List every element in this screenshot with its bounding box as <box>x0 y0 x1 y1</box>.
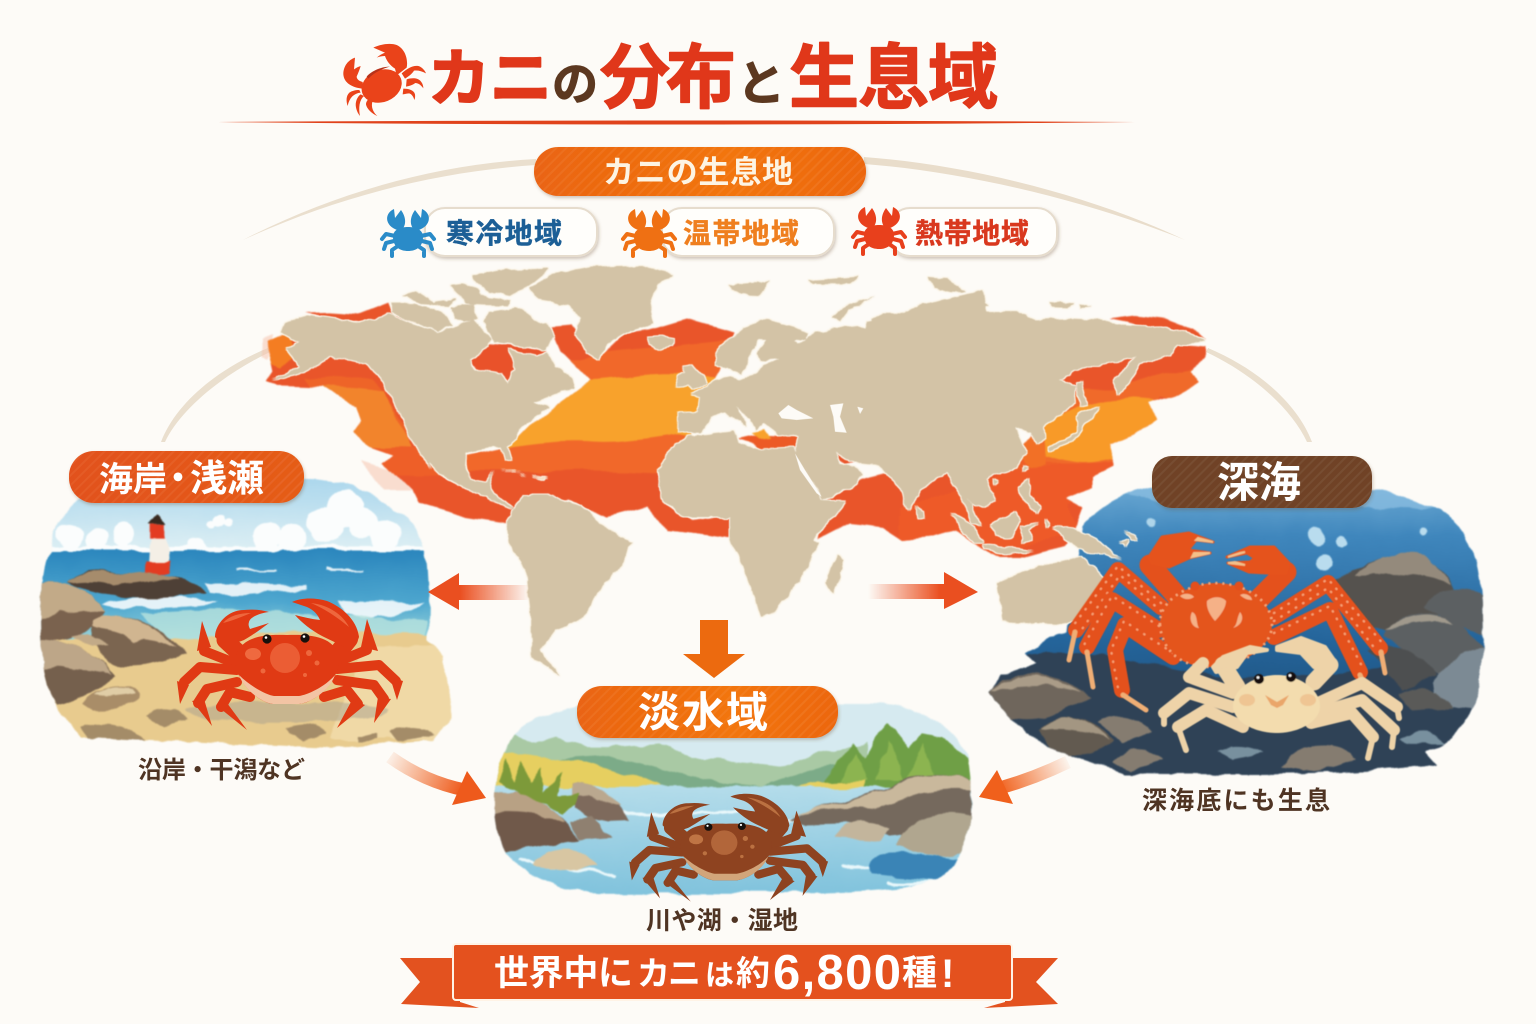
panel: coast and shallows <box>30 473 463 760</box>
banner text: カニ <box>637 955 701 992</box>
heading pill: coast and shallows <box>69 451 304 503</box>
Bering Sea west <box>1110 315 1206 340</box>
arrow: to coast <box>428 573 531 610</box>
banner text: は <box>705 960 734 992</box>
heading pill: habitats: カニの生息地 <box>603 155 793 190</box>
land masses <box>273 266 1205 675</box>
Mediterranean <box>737 428 856 467</box>
snow crab <box>1164 638 1399 758</box>
land: Europe and western Asia <box>675 277 1003 511</box>
decorative arc behind the map <box>161 157 1312 442</box>
panel: freshwater <box>477 700 997 902</box>
icon: title crab <box>343 44 426 116</box>
title text: の <box>552 58 598 110</box>
legend: cold regions <box>382 208 597 256</box>
king crab <box>1069 533 1385 710</box>
heading pill: deep sea: 深海 <box>1217 459 1301 506</box>
legend: temperate regions <box>623 208 834 256</box>
heading pill: habitats <box>534 147 866 196</box>
title rule <box>218 120 1135 124</box>
banner text: 種 <box>902 954 937 993</box>
banner text <box>494 946 954 1000</box>
banner text: 約 <box>736 955 770 993</box>
arrow: coast to freshwater <box>390 757 486 805</box>
banner text: 6,800 <box>773 946 901 1000</box>
heading pill: coast and shallows: 浅瀬 <box>190 458 264 499</box>
land: North America, Arctic islands and Greenland <box>273 266 675 510</box>
Atlantic bands <box>466 318 736 538</box>
freshwater crab <box>629 794 828 902</box>
caption: coast: 沿岸・干潟など <box>138 757 305 784</box>
caption: deep sea: 深海底にも生息 <box>1142 786 1330 815</box>
legend: tropical regions <box>853 207 1057 256</box>
title text: カニ <box>428 45 552 114</box>
arrow: deep sea to freshwater <box>979 762 1068 804</box>
title text: 分布 <box>600 39 736 117</box>
legend: tropical regions: 熱帯地域 <box>915 218 1029 249</box>
legend: temperate regions: 温帯地域 <box>683 218 799 249</box>
inland seas <box>778 403 863 497</box>
heading pill: coast and shallows: 海岸 <box>99 461 167 499</box>
heading pill: coast and shallows: ・ <box>161 460 195 498</box>
land: Africa <box>658 432 845 617</box>
Pacific bands <box>260 303 547 532</box>
arrow: to deep sea <box>868 572 978 609</box>
freshwater scene background <box>477 700 997 897</box>
ocean zones <box>260 300 1240 570</box>
banner: species count <box>400 944 1058 1008</box>
heading pill: deep sea <box>1152 456 1372 508</box>
coast scene background <box>30 473 463 760</box>
heading pill: freshwater <box>577 686 838 738</box>
caption: freshwater: 川や湖・湿地 <box>646 907 798 935</box>
legend: cold regions: 寒冷地域 <box>446 218 562 249</box>
title text: と <box>737 58 785 111</box>
title text <box>428 39 998 117</box>
world map <box>260 266 1240 675</box>
land: East Asia and islands <box>867 295 1205 560</box>
land: South America, Madagascar and Australia <box>506 495 1106 675</box>
Bering Sea <box>307 303 423 324</box>
heading pill: freshwater: 淡水域 <box>638 689 768 736</box>
panel: deep sea background <box>988 486 1486 777</box>
Hudson Bay and strait <box>468 342 547 385</box>
title text: 生息域 <box>789 39 998 117</box>
Western Pacific and Indian Ocean bands <box>816 345 1207 559</box>
ribbon body <box>453 944 1012 1000</box>
title <box>343 39 998 117</box>
coast crab <box>177 598 403 730</box>
pale wash at the map edges <box>262 334 410 490</box>
ribbon tails <box>400 958 479 1008</box>
legend <box>382 207 1057 256</box>
banner text: 世界中に <box>494 954 633 993</box>
arrow: to freshwater <box>683 620 745 678</box>
banner text: ! <box>941 952 954 996</box>
